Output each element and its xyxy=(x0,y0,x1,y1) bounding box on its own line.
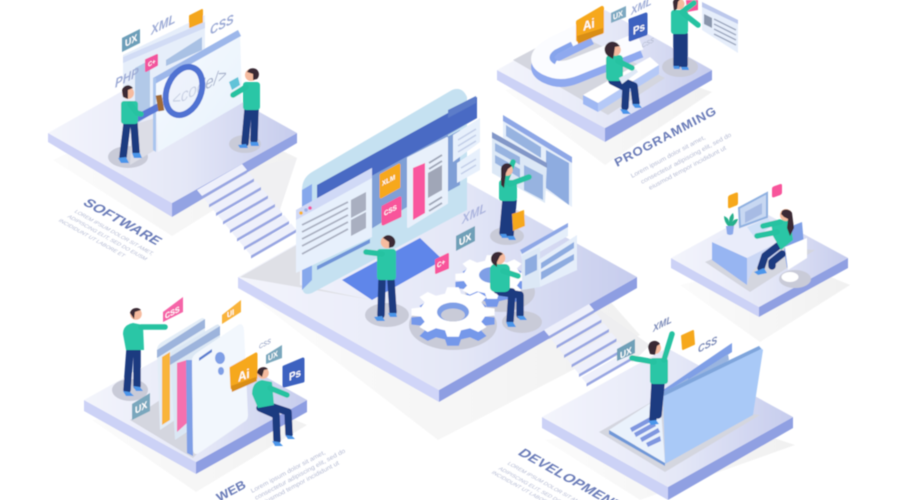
caption: programming: consectetur adipiscing elit, sed do xyxy=(640,132,733,186)
caption: software: LOREM IPSUM DOLOR SIT AMET, xyxy=(72,210,155,257)
CSS label web: CSS xyxy=(259,338,271,351)
gear: front xyxy=(411,287,495,346)
icon: C+ pink badge: C+ xyxy=(148,58,156,69)
gear: back xyxy=(455,255,529,307)
floor shadows xyxy=(53,70,850,500)
person: seated woman xyxy=(490,252,527,327)
icon: Ps badge web: Ps xyxy=(289,367,301,384)
icon: UI tag web xyxy=(222,300,241,324)
caption: programming: Lorem ipsum dolor sit amet, xyxy=(630,134,707,180)
stairs: central to development xyxy=(544,304,632,386)
caption: software xyxy=(56,197,165,262)
CSS label programming: CSS xyxy=(642,37,654,50)
caption: programming: PROGRAMMING xyxy=(612,103,719,170)
icon: Ps badge: Ps xyxy=(633,21,645,38)
panels: side text windows xyxy=(448,96,480,183)
caption: software: SOFTWARE xyxy=(79,197,165,248)
XML label centre: XML xyxy=(461,199,486,227)
XML label software: XML xyxy=(150,10,175,38)
panel: central platform xyxy=(238,165,637,402)
windows: floating behind woman xyxy=(492,115,572,207)
icon: UX tag web xyxy=(132,393,150,420)
icon: UX tag development: UX xyxy=(620,345,632,362)
laptop xyxy=(609,343,763,466)
icon: CSS badge monitor xyxy=(383,198,400,224)
icon: C+ badge centre xyxy=(436,254,448,273)
stairs: software to central xyxy=(197,164,296,258)
icon: UX tag web: UX xyxy=(135,399,148,417)
monitor xyxy=(302,89,477,300)
icon: UX tag centre xyxy=(456,226,475,251)
person: man pointing xyxy=(123,308,165,396)
XML label development: XML xyxy=(652,314,672,335)
icon: UX tag development xyxy=(617,339,635,362)
icon: CSS badge monitor: CSS xyxy=(384,204,397,218)
person: seated woman with laptop xyxy=(605,42,642,114)
icon: C+ badge centre: C+ xyxy=(437,259,445,270)
bench xyxy=(583,57,659,112)
CSS label software: CSS xyxy=(210,11,234,38)
person: man at monitor xyxy=(366,235,397,321)
panel: programming platform xyxy=(497,10,712,142)
person: man on laptop xyxy=(632,334,672,425)
icon: UX tag programming xyxy=(611,6,626,23)
panel: software platform xyxy=(48,63,297,217)
web app cards xyxy=(157,318,248,456)
caption: web xyxy=(214,448,347,500)
icon: UX tag programming: UX xyxy=(613,8,624,22)
icon: orange badge xyxy=(190,10,202,27)
icon: UX tag software xyxy=(122,29,140,52)
windows: beside seated woman xyxy=(520,223,577,290)
person: woman with bag xyxy=(499,162,529,240)
icon: Ps badge web xyxy=(284,359,303,386)
CSS label development: CSS xyxy=(698,334,717,356)
icon: Ai badge web: Ai xyxy=(238,365,250,385)
caption: programming: eiusmod tempor incididunt ut xyxy=(648,145,727,192)
icon: orange badge development xyxy=(682,331,694,349)
icon: pink badge desk xyxy=(772,183,782,198)
window: programming text panel xyxy=(702,2,738,53)
panel: desk platform xyxy=(671,210,848,317)
icon: CSS tag web: CSS xyxy=(165,304,180,321)
panel: software code windows: <code/> xyxy=(172,64,227,111)
icon: Ai badge programming xyxy=(577,8,603,44)
icon: UX tag near Ps xyxy=(266,345,282,364)
icon: orange badge desk xyxy=(728,192,738,209)
icon: UI tag web: UI xyxy=(227,307,234,320)
caption: software: ADIPISCING ELIT, SED DO EIUSM xyxy=(65,215,149,262)
desk with computer xyxy=(712,193,795,285)
caption: web: Lorem ipsum dolor sit amet, xyxy=(250,449,327,495)
person: woman at desk with chair xyxy=(754,209,807,282)
icon: UX tag centre: UX xyxy=(459,231,472,249)
panel: web platform xyxy=(84,338,307,474)
window: left floating xyxy=(296,168,372,273)
caption: software: INCIDIDUNT UT LABORE ET xyxy=(56,219,127,259)
person: seated man xyxy=(252,367,295,446)
person: standing woman programming xyxy=(671,0,698,70)
icon: plant xyxy=(724,213,738,235)
icon: XLM badge xyxy=(381,165,399,197)
icon: C+ pink badge xyxy=(146,55,157,71)
caption: programming xyxy=(612,103,733,192)
icon: Ps badge xyxy=(630,14,646,40)
person: bearded man with magnifier xyxy=(118,85,142,163)
icon: XLM badge: XLM xyxy=(382,174,395,188)
icon: UX tag software: UX xyxy=(125,32,138,50)
panel: development platform xyxy=(542,348,793,500)
icon: CSS tag web xyxy=(163,297,183,322)
person: man with tablet xyxy=(229,68,260,148)
PHP label: PHP xyxy=(115,64,139,91)
magnifying glass xyxy=(130,61,209,122)
panel: software code windows xyxy=(123,15,242,152)
icon: UX tag near Ps: UX xyxy=(268,349,278,363)
magnet shape xyxy=(540,28,640,78)
icon: Ai badge web xyxy=(231,354,257,392)
window: pink bar panel xyxy=(408,138,447,227)
icon: Ai badge programming: Ai xyxy=(583,16,595,34)
